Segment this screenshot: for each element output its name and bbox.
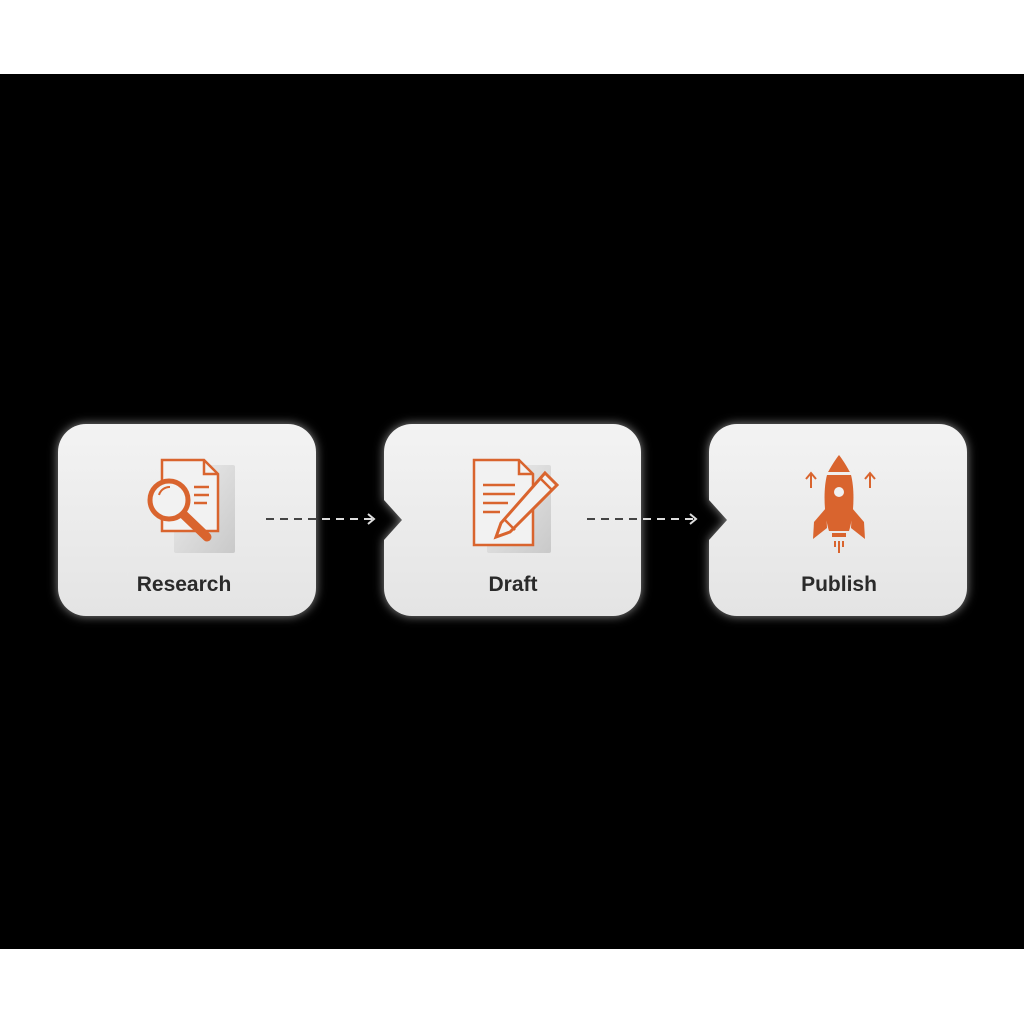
arrow: draft to publish — [587, 514, 696, 524]
label: Research: Research — [137, 573, 231, 596]
icon: document with pencil — [474, 460, 557, 553]
card: research — [58, 424, 316, 616]
icon: document with magnifier — [150, 460, 235, 553]
icon: rocket — [806, 455, 875, 553]
arrow: research to draft — [266, 514, 374, 524]
card: publish — [709, 424, 967, 616]
label: Publish: Publish — [801, 573, 877, 596]
label: Draft: Draft — [488, 573, 538, 596]
card: draft — [384, 424, 641, 616]
